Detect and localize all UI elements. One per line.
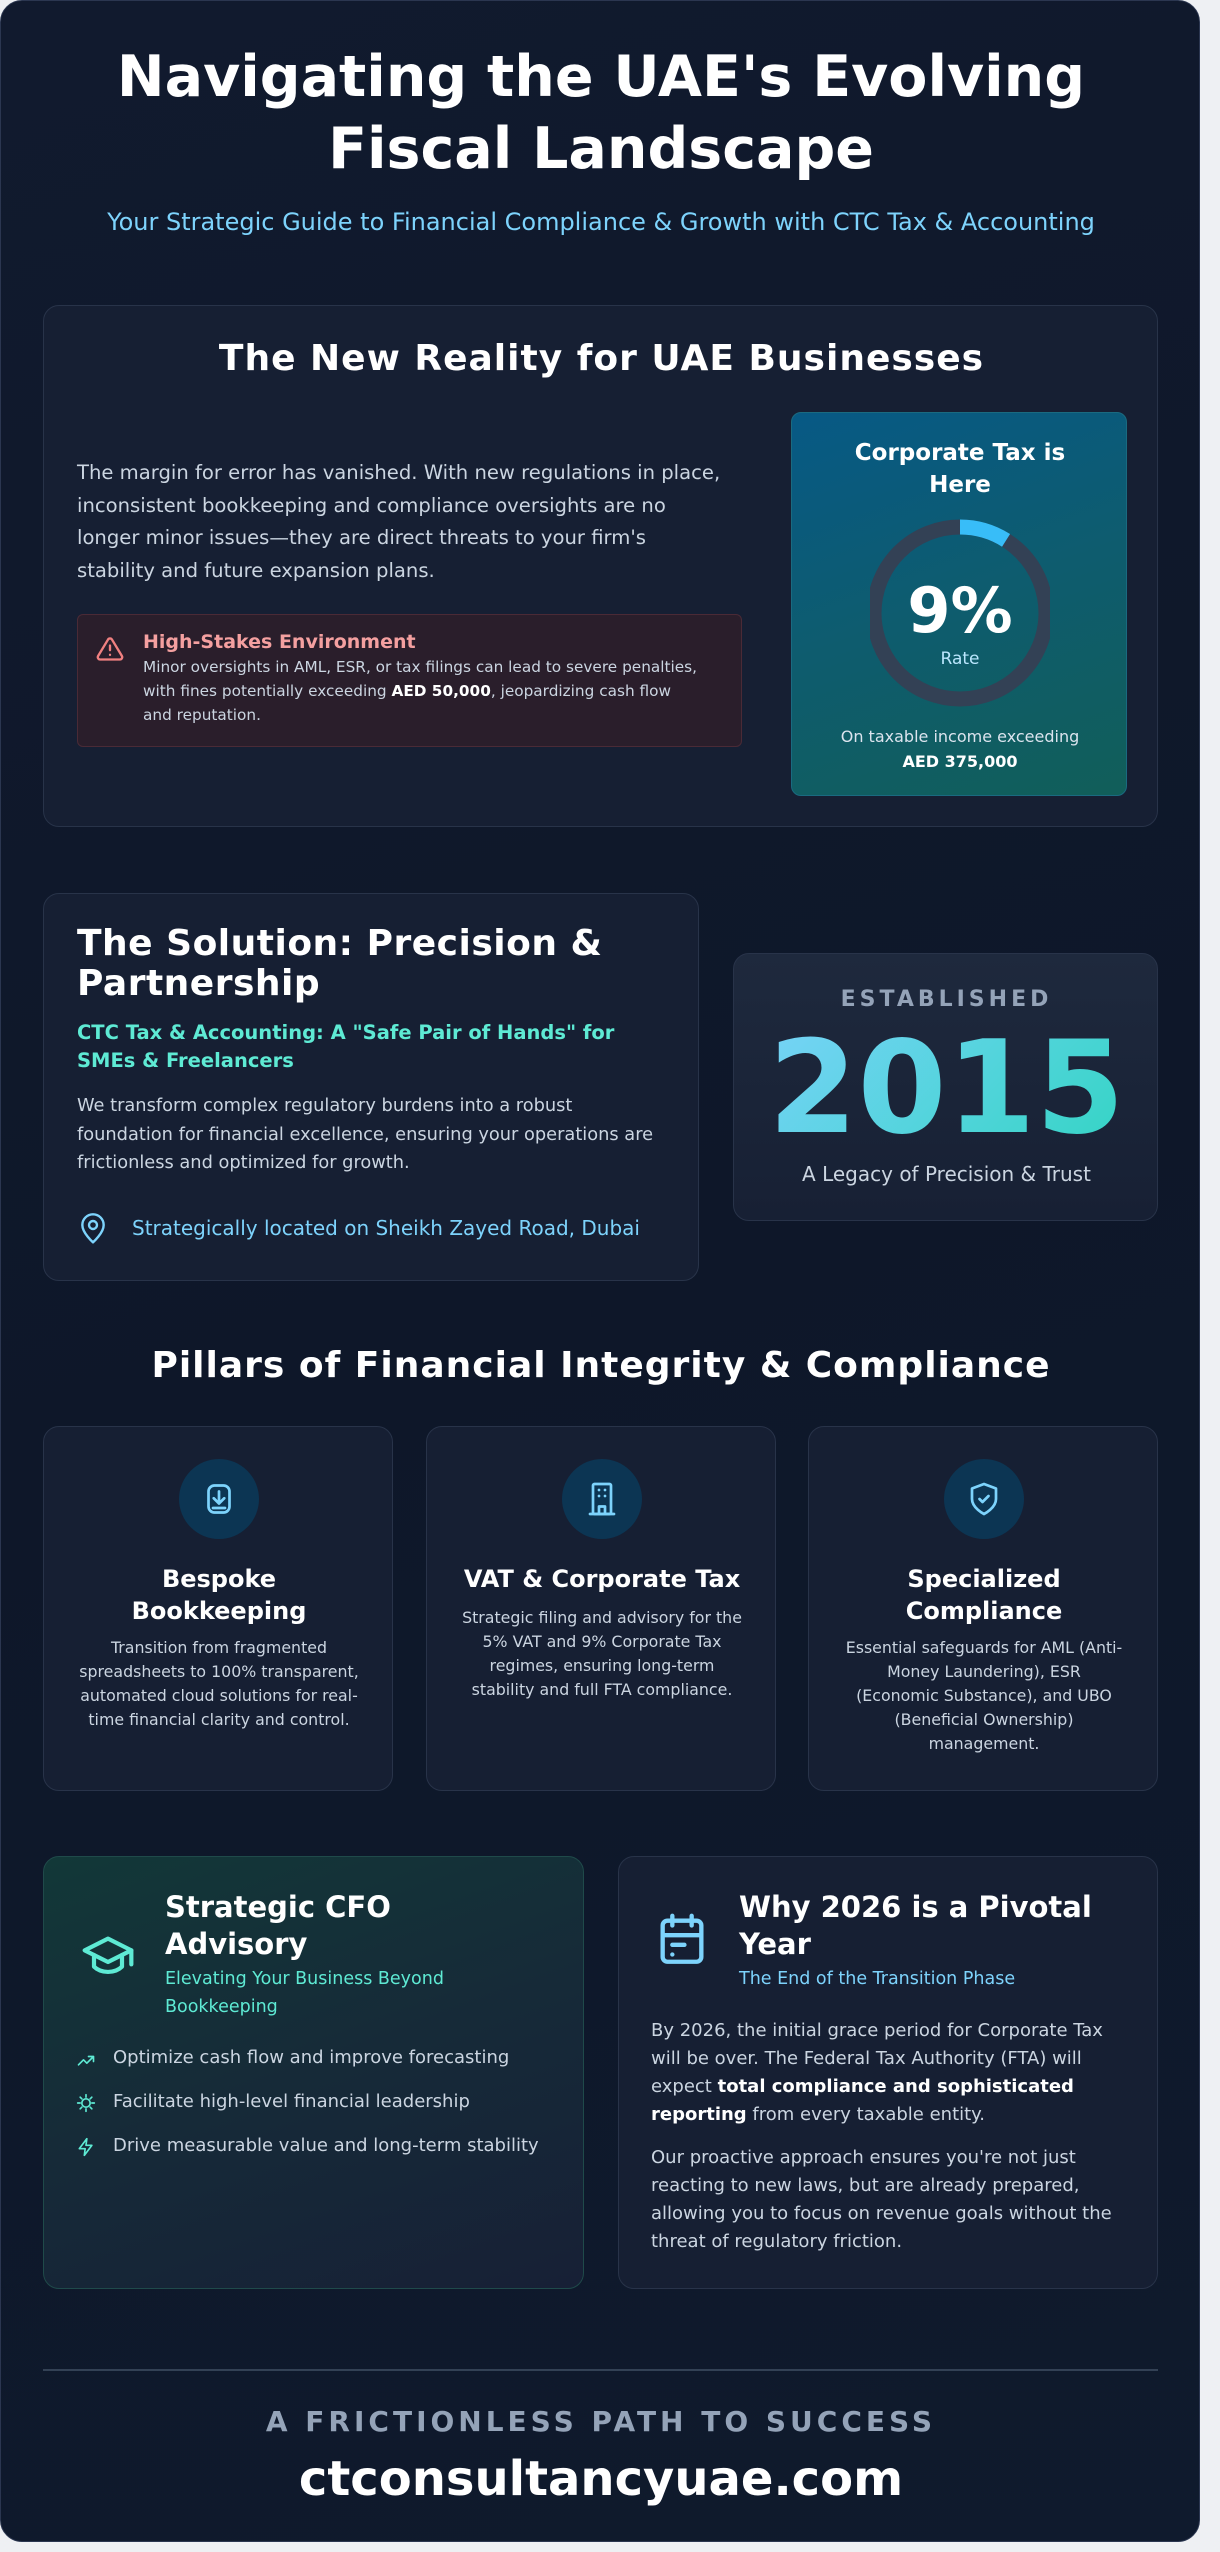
desc: Essential safeguards for AML (Anti-: [846, 1638, 1122, 1657]
location: Strategically located on Sheikh Zayed Road, Dubai: [132, 1216, 640, 1240]
panel: why 2026: [618, 1856, 1158, 2289]
heading: [165, 1890, 391, 1961]
subheading: [165, 1969, 444, 2017]
icon: graduation cap: [82, 1936, 134, 1974]
heading: Strategic CFO: [165, 1890, 391, 1924]
desc: spreadsheets to 100% transparent,: [79, 1662, 359, 1681]
title: Compliance: [906, 1597, 1062, 1625]
paragraph: [76, 461, 720, 582]
tax heading: Corporate Tax is: [855, 440, 1065, 466]
body: reporting from every taxable entity.: [651, 2104, 985, 2125]
desc: 5% VAT and 9% Corporate Tax: [482, 1632, 722, 1651]
panel: solution: [43, 893, 699, 1281]
footer url: ctconsultancyuae.com: [299, 2451, 903, 2507]
body: expect total compliance and sophisticated: [651, 2076, 1074, 2097]
paragraph: We transform complex regulatory burdens into a robust: [77, 1095, 572, 1116]
panel: established: [733, 953, 1158, 1221]
title: Specialized: [907, 1565, 1061, 1593]
desc: [462, 1608, 742, 1699]
desc: time financial clarity and control.: [88, 1710, 350, 1729]
subheading: [77, 1021, 614, 1072]
tax heading: [855, 440, 1065, 498]
body: reacting to new laws, but are already prepared,: [651, 2175, 1079, 2196]
label: ESTABLISHED: [841, 987, 1052, 1012]
heading: pillars: Pillars of Financial Integrity & Compliance: [151, 1345, 1051, 1386]
title: Navigating the UAE's Evolving: [117, 44, 1085, 110]
callout: high stakes: [77, 614, 742, 747]
desc: automated cloud solutions for real-: [80, 1686, 358, 1705]
subheading: CTC Tax & Accounting: A "Safe Pair of Hands" for: [77, 1021, 614, 1044]
subtitle: Your Strategic Guide to Financial Compliance & Growth with CTC Tax & Accounting: [107, 208, 1095, 236]
panel: new reality: [43, 305, 1158, 827]
footer tagline: A FRICTIONLESS PATH TO SUCCESS: [266, 2405, 936, 2438]
paragraph: inconsistent bookkeeping and compliance oversights are no: [77, 494, 666, 516]
donut chart: 9%: [907, 574, 1013, 647]
callout text: High-Stakes Environment: [143, 631, 416, 653]
heading: The Solution: Precision & Partnership: [77, 923, 602, 1004]
tagline: A Legacy of Precision & Trust: [802, 1162, 1091, 1186]
bullet 1: Optimize cash flow and improve forecasting: [113, 2047, 509, 2068]
donut chart: Rate: [941, 649, 979, 669]
heading: Advisory: [165, 1927, 307, 1961]
subheading: Bookkeeping: [165, 1997, 278, 2017]
body: By 2026, the initial grace period for Corporate Tax: [651, 2020, 1103, 2041]
title: Bookkeeping: [132, 1597, 306, 1625]
heading: [738, 1890, 1092, 1961]
title: VAT & Corporate Tax: [464, 1565, 740, 1593]
desc: regimes, ensuring long-term: [490, 1656, 714, 1675]
paragraph: stability and future expansion plans.: [77, 558, 435, 582]
title: [132, 1565, 306, 1625]
heading: Year: [739, 1927, 811, 1961]
icon: pin: [81, 1213, 105, 1244]
body: allowing you to focus on revenue goals without the: [651, 2203, 1112, 2224]
callout text: [143, 631, 697, 724]
bullet 3: Drive measurable value and long-term stability: [113, 2135, 539, 2156]
pillar: vat: [426, 1426, 776, 1791]
body: threat of regulatory friction.: [651, 2231, 902, 2252]
paragraph: longer minor issues—they are direct threats to your firm's: [77, 526, 646, 549]
callout text: Minor oversights in AML, ESR, or tax filings can lead to severe penalties,: [143, 658, 697, 676]
desc: Strategic filing and advisory for the: [462, 1608, 742, 1627]
desc: (Beneficial Ownership): [895, 1710, 1073, 1729]
body: will be over. The Federal Tax Authority (FTA) will: [651, 2048, 1082, 2069]
icon: warning: [96, 637, 124, 661]
tax note: AED 375,000: [902, 752, 1018, 771]
icon: calendar: [660, 1914, 704, 1964]
icon: download: [179, 1459, 259, 1539]
tax card: [791, 412, 1127, 796]
desc: Transition from fragmented: [111, 1638, 327, 1657]
tax note: On taxable income exceeding: [841, 727, 1079, 746]
callout text: and reputation.: [143, 706, 261, 724]
icon: building: [562, 1459, 642, 1539]
donut chart: [870, 520, 1050, 706]
desc: [846, 1638, 1122, 1753]
pillar: bookkeeping: [43, 1426, 393, 1791]
desc: management.: [929, 1734, 1039, 1753]
desc: [79, 1638, 359, 1729]
desc: (Economic Substance), and UBO: [856, 1686, 1112, 1705]
title: Fiscal Landscape: [328, 116, 874, 182]
bullet list: [76, 2047, 539, 2156]
subheading: The End of the Transition Phase: [739, 1969, 1015, 1989]
title: [117, 44, 1085, 182]
paragraph: The margin for error has vanished. With new regulations in place,: [77, 461, 720, 484]
desc: Money Laundering), ESR: [887, 1662, 1081, 1681]
heading: Why 2026 is a Pivotal: [739, 1890, 1092, 1924]
title: Bespoke: [162, 1565, 276, 1593]
tax note: [841, 727, 1079, 771]
title: [906, 1565, 1062, 1625]
body: [651, 2020, 1112, 2252]
subheading: SMEs & Freelancers: [77, 1049, 294, 1072]
year: 2015: [768, 1014, 1125, 1163]
paragraph: frictionless and optimized for growth.: [77, 1152, 410, 1173]
pillar: compliance: [808, 1426, 1158, 1791]
panel: CFO advisory: [43, 1856, 584, 2289]
icon: shield: [944, 1459, 1024, 1539]
tax heading: Here: [929, 472, 991, 498]
callout text: with fines potentially exceeding AED 50,000, jeopardizing cash flow: [143, 682, 671, 700]
bullet 2: Facilitate high-level financial leadership: [113, 2091, 470, 2112]
paragraph: foundation for financial excellence, ensuring your operations are: [77, 1124, 653, 1144]
paragraph: [77, 1095, 653, 1173]
subheading: Elevating Your Business Beyond: [165, 1969, 444, 1989]
desc: stability and full FTA compliance.: [472, 1680, 732, 1699]
heading: The New Reality for UAE Businesses: [219, 338, 984, 379]
body: Our proactive approach ensures you're not just: [651, 2147, 1076, 2168]
